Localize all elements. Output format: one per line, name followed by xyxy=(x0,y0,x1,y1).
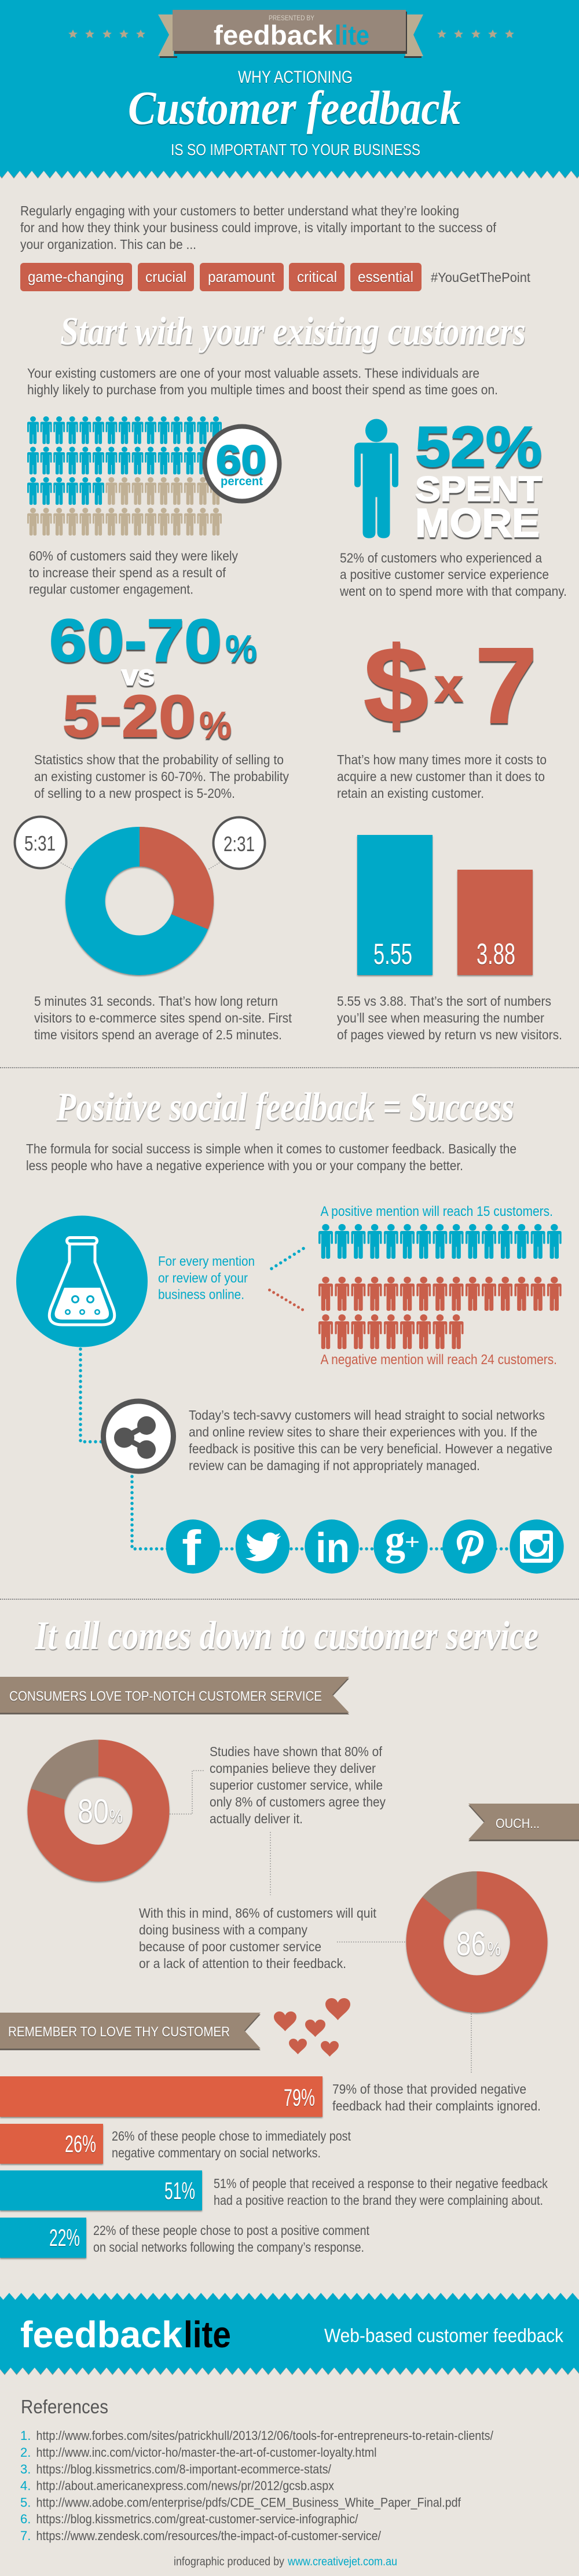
pages caption: you’ll see when measuring the number xyxy=(337,1010,544,1025)
keyword tags: critical xyxy=(297,268,337,285)
references list: 7. xyxy=(20,2529,31,2543)
time caption: time visitors spend an average of 2.5 minutes. xyxy=(34,1027,282,1042)
keyword tags: paramount xyxy=(208,268,276,285)
social section intro xyxy=(26,1141,516,1173)
icon: linkedin: in xyxy=(316,1525,350,1571)
people row: positive 15 xyxy=(318,1224,562,1259)
quit text: With this in mind, 86% of customers will quit xyxy=(139,1906,377,1921)
bar: 79 percent: 79% of those that provided negative xyxy=(332,2082,526,2097)
ribbon banner with logo xyxy=(158,10,423,58)
intro text: for and how they think your business could improve, is vitally important to the success of xyxy=(20,220,497,235)
60 percent badge: 60 xyxy=(216,437,266,482)
credit line xyxy=(174,2556,397,2568)
bubble 2:31: 2:31 xyxy=(223,832,255,856)
52 percent caption: a positive customer service experience xyxy=(340,567,549,582)
ribbon banner with logo: lite xyxy=(335,20,369,50)
donut chart: time on site xyxy=(15,816,265,955)
donut chart: 80 percent: 80 xyxy=(78,1793,109,1830)
share text: review can be damaging if not appropriately managed. xyxy=(189,1458,480,1473)
60 percent caption: regular customer engagement. xyxy=(29,581,193,596)
references list: 4. xyxy=(20,2478,31,2493)
bar: 79 percent xyxy=(0,2076,541,2117)
footer band xyxy=(0,2292,579,2376)
header band xyxy=(0,0,579,179)
60 percent badge: percent xyxy=(221,475,263,488)
bar: 22 percent xyxy=(0,2218,370,2258)
donut chart: 86 percent: % xyxy=(488,1939,501,1959)
references list: https://blog.kissmetrics.com/great-customer-service-infographic/ xyxy=(36,2512,358,2526)
cost caption xyxy=(337,752,547,801)
references list: https://blog.kissmetrics.com/8-important-ecommerce-stats/ xyxy=(36,2462,332,2476)
keyword tags xyxy=(20,263,531,291)
keyword tags: essential xyxy=(358,268,413,285)
keyword tags: game-changing xyxy=(28,268,124,285)
references list: http://www.forbes.com/sites/patrickhull/2013/12/06/tools-for-entrepreneurs-to-retain-clients/ xyxy=(36,2428,494,2443)
icon: hearts xyxy=(274,1998,350,2057)
stat: dollar times 7: 7 xyxy=(475,626,537,746)
ribbon: ouch: OUCH... xyxy=(496,1816,540,1831)
ribbon banner with logo: PRESENTED BY xyxy=(269,14,314,22)
keyword tags: #YouGetThePoint xyxy=(431,270,531,285)
people grid 60 percent xyxy=(27,416,222,536)
ribbon: consumers love: CONSUMERS LOVE TOP-NOTCH CUSTOMER SERVICE xyxy=(9,1688,322,1705)
time caption xyxy=(34,994,292,1042)
quit text: or a lack of attention to their feedback. xyxy=(139,1956,346,1971)
icon: instagram xyxy=(510,1519,564,1574)
ribbon: remember to love xyxy=(0,2013,261,2050)
references list: 3. xyxy=(20,2462,31,2476)
bar: 22 percent: 22% of these people chose to post a positive comment xyxy=(93,2223,370,2238)
pages caption: of pages viewed by return vs new visitors. xyxy=(337,1027,562,1042)
credit line: infographic produced by xyxy=(174,2556,284,2568)
footer logo: lite xyxy=(184,2314,231,2355)
stat: dollar times 7: $ xyxy=(364,625,428,745)
bar: 26 percent: 26% xyxy=(65,2130,96,2157)
stat: dollar times 7 xyxy=(364,625,537,746)
probability caption: Statistics show that the probability of selling to xyxy=(34,752,284,767)
studies text: only 8% of customers agree they xyxy=(210,1794,386,1809)
section intro: Your existing customers are one of your most valuable assets. These individuals are xyxy=(27,366,479,381)
pages caption: 5.55 vs 3.88. That’s the sort of numbers xyxy=(337,994,551,1009)
people rows: negative 24 xyxy=(318,1277,562,1349)
share text xyxy=(189,1408,552,1473)
social section intro: The formula for social success is simple when it comes to customer feedback. Basically the xyxy=(26,1141,516,1156)
stat: probability of selling: vs xyxy=(122,660,155,691)
positive mention label: A positive mention will reach 15 customers. xyxy=(321,1204,553,1219)
mention text: For every mention xyxy=(158,1254,255,1269)
bar chart: pages viewed: 3.88 xyxy=(477,937,515,970)
social section intro: less people who have a negative experience with you or your company the better. xyxy=(26,1158,463,1173)
donut chart: 86 percent xyxy=(337,1871,529,2073)
references list: 1. xyxy=(20,2428,31,2443)
bar: 51 percent xyxy=(0,2170,548,2211)
title xyxy=(128,68,461,159)
stat: dollar times 7: x xyxy=(435,659,463,711)
icon: facebook: f xyxy=(182,1521,201,1576)
cost caption: acquire a new customer than it does to xyxy=(337,769,545,784)
share text: and online review sites to share their experiences with you. If the xyxy=(189,1424,537,1439)
icon: facebook xyxy=(166,1519,220,1576)
keyword tags: crucial xyxy=(145,268,186,285)
bar chart: pages viewed xyxy=(357,835,533,975)
52 percent spent more: SPENT xyxy=(415,470,542,508)
quit text: doing business with a company xyxy=(139,1922,307,1937)
stat: probability of selling: 5-20 xyxy=(63,683,196,749)
time caption: visitors to e-commerce sites spend on-site. First xyxy=(34,1010,292,1025)
icon: google plus xyxy=(373,1516,428,1574)
studies text: Studies have shown that 80% of xyxy=(210,1744,383,1759)
bar: 79 percent: 79% xyxy=(284,2084,315,2111)
60 percent caption: 60% of customers said they were likely xyxy=(29,548,238,563)
footer logo: feedback xyxy=(20,2314,182,2355)
credit line: www.creativejet.com.au xyxy=(287,2556,397,2568)
share text: feedback is positive this can be very beneficial. However a negative xyxy=(189,1441,552,1456)
52 percent spent more: 52% xyxy=(415,415,542,478)
bar: 51 percent: 51% xyxy=(164,2177,195,2204)
mention text: business online. xyxy=(158,1287,244,1302)
references list: 5. xyxy=(20,2496,31,2509)
references list: 2. xyxy=(20,2445,31,2460)
52 percent caption: 52% of customers who experienced a xyxy=(340,550,542,565)
quit text xyxy=(139,1906,377,1971)
intro text: your organization. This can be ... xyxy=(20,237,196,252)
ribbon: ouch xyxy=(468,1804,579,1841)
60 percent badge xyxy=(205,426,279,501)
stars right xyxy=(437,30,514,38)
icon: large person xyxy=(354,419,398,538)
icon: google plus: + xyxy=(405,1530,420,1553)
cost caption: retain an existing customer. xyxy=(337,786,484,801)
cost caption: That’s how many times more it costs to xyxy=(337,752,547,767)
share text: Today’s tech-savvy customers will head straight to social networks xyxy=(189,1408,545,1423)
title: IS SO IMPORTANT TO YOUR BUSINESS xyxy=(171,141,420,159)
icon: pinterest xyxy=(442,1519,497,1574)
stat: probability of selling xyxy=(49,607,257,749)
references list: 6. xyxy=(20,2512,31,2526)
pages caption xyxy=(337,994,562,1042)
bubble 5:31: 5:31 xyxy=(24,831,56,855)
probability caption: an existing customer is 60-70%. The probability xyxy=(34,769,289,784)
donut chart: 86 percent: 86 xyxy=(456,1925,486,1963)
icon: google plus: g xyxy=(385,1516,405,1564)
ribbon: remember to love: REMEMBER TO LOVE THY CUSTOMER xyxy=(8,2024,230,2040)
intro text: Regularly engaging with your customers to better understand what they’re looking xyxy=(20,203,459,218)
probability caption: of selling to a new prospect is 5-20%. xyxy=(34,786,235,801)
bar: 22 percent: 22% xyxy=(49,2224,80,2251)
bar chart: pages viewed: 5.55 xyxy=(373,937,412,970)
bar: 26 percent xyxy=(0,2124,351,2164)
studies text: companies believe they deliver xyxy=(210,1761,376,1776)
references list: http://about.americanexpress.com/news/pr/2012/gcsb.aspx xyxy=(36,2478,334,2493)
stars left xyxy=(68,30,145,38)
icon: twitter xyxy=(236,1519,290,1574)
bar: 26 percent: 26% of these people chose to immediately post xyxy=(112,2128,351,2143)
probability caption xyxy=(34,752,289,801)
52 percent spent more xyxy=(415,415,542,545)
donut chart: 80 percent: % xyxy=(109,1806,123,1827)
studies text: actually deliver it. xyxy=(210,1811,303,1826)
ribbon banner with logo: feedback xyxy=(214,20,334,50)
bubble 2:31 xyxy=(213,818,265,869)
bar: 79 percent: feedback had their complaints ignored. xyxy=(332,2098,541,2113)
mention text: or review of your xyxy=(158,1270,248,1285)
title: Customer feedback xyxy=(128,81,461,134)
title: WHY ACTIONING xyxy=(238,68,353,87)
icon: share xyxy=(103,1401,174,1471)
mention text xyxy=(158,1254,255,1302)
icon: linkedin xyxy=(305,1519,359,1574)
52 percent spent more: MORE xyxy=(415,500,540,545)
stat: probability of selling: % xyxy=(199,703,232,746)
references list: http://www.adobe.com/enterprise/pdfs/CDE_CEM_Business_White_Paper_Final.pdf xyxy=(36,2496,461,2509)
references list: https://www.zendesk.com/resources/the-impact-of-customer-service/ xyxy=(36,2529,382,2543)
studies text xyxy=(210,1744,386,1826)
section intro xyxy=(27,366,498,397)
references list xyxy=(20,2428,494,2543)
intro text xyxy=(20,203,497,252)
icon: flask xyxy=(16,1216,148,1347)
stat: probability of selling: % xyxy=(225,627,257,670)
donut chart: 80 percent xyxy=(31,1739,204,1863)
stat: probability of selling: 60-70 xyxy=(49,607,222,675)
references heading: References xyxy=(21,2396,108,2417)
60 percent caption: to increase their spend as a result of xyxy=(29,565,226,580)
references list: http://www.inc.com/victor-ho/master-the-art-of-customer-loyalty.html xyxy=(36,2445,376,2460)
52 percent caption xyxy=(339,550,567,599)
studies text: superior customer service, while xyxy=(210,1778,383,1793)
bubble 5:31 xyxy=(15,816,66,869)
ribbon: consumers love xyxy=(0,1677,349,1714)
section intro: highly likely to purchase from you multiple times and boost their spend as time goes on. xyxy=(27,382,498,397)
bar: 22 percent: on social networks following the company’s response. xyxy=(93,2240,364,2255)
bar: 26 percent: negative commentary on social networks. xyxy=(112,2145,321,2160)
time caption: 5 minutes 31 seconds. That’s how long return xyxy=(34,994,278,1009)
quit text: because of poor customer service xyxy=(139,1939,321,1954)
60 percent caption xyxy=(29,548,238,596)
